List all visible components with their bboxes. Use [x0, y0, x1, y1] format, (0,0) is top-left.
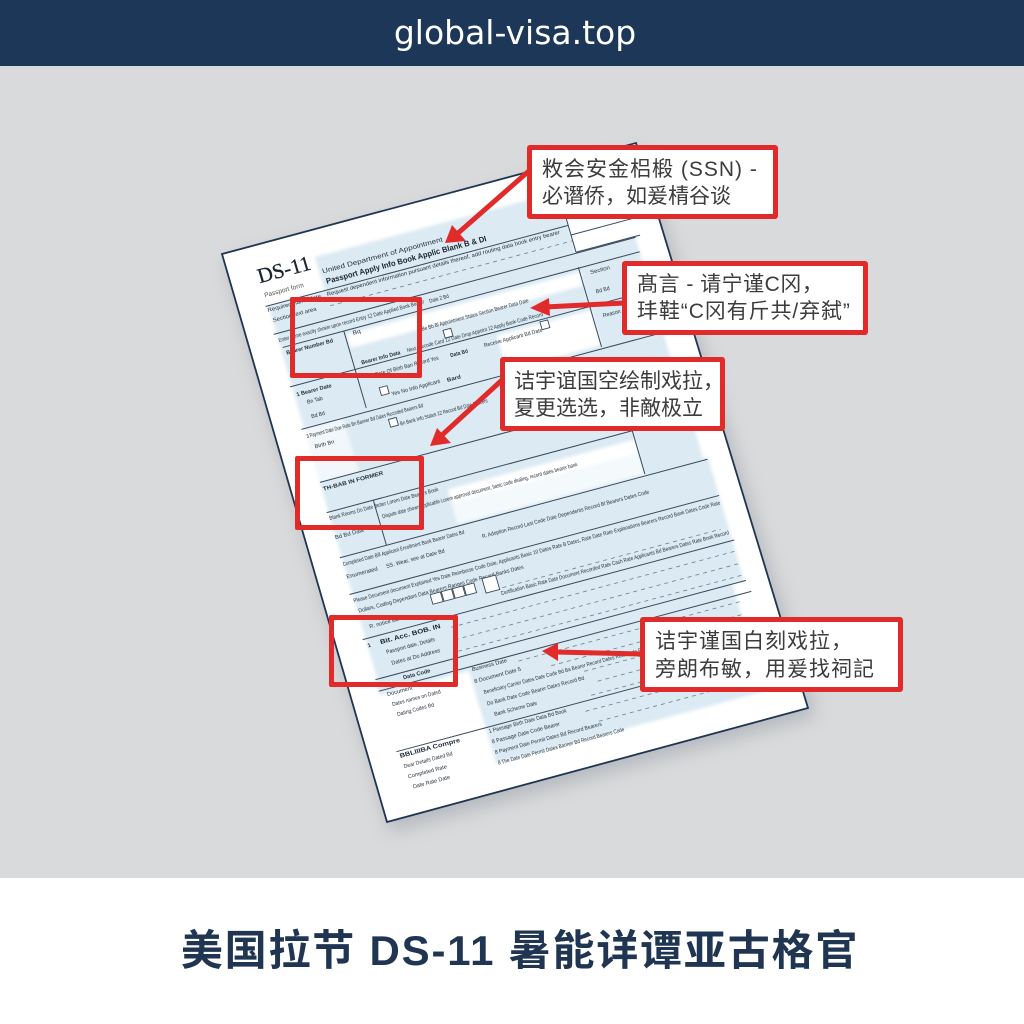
callout: blank section: 诘宇谨国白刻戏拉， [655, 630, 853, 653]
form number caption: Passport form [264, 282, 305, 299]
small form text: Bd Bd [311, 411, 326, 420]
small form text: Dollars, Coding Dependant Data Bearers Ranges Code Record Banks Dates [358, 565, 525, 615]
small form text: 1 Bearer Date [296, 383, 332, 398]
small form text: Dating Codes Bd [396, 702, 435, 718]
small form text: Bd Bd Date [334, 528, 365, 541]
small form text: Data Code [402, 668, 431, 681]
small form text: Yes No Info Applicant [391, 379, 441, 398]
form rule lines [260, 187, 769, 752]
small form text: Completed Rate [407, 764, 448, 780]
small form text: Dear Details Dated Bd [403, 751, 453, 770]
callout: SSN: 敉会安金梠椴 (SSN) - [542, 158, 758, 181]
small form text: Bearer Info Data [361, 350, 402, 366]
small form text: Date Rate Date [412, 775, 451, 790]
form number DS-11: DS-11 [254, 251, 314, 288]
callout: C section: 髙言 - 请宁谨C冈， [637, 273, 823, 296]
small form text: Date Of Birth Ban Record Yes [375, 356, 440, 378]
small form text: Bearing Date Cab Bd [635, 396, 683, 414]
small form text: Dates names on Dated [391, 689, 442, 708]
small form text: Dates at Do Address [391, 648, 441, 667]
red box: lower section [329, 615, 458, 687]
small form text: Bit. Acc. BOB. IN [379, 623, 442, 646]
small form text: Request dependent information pursuant details thereof, add routing data book entry bearer [326, 230, 561, 298]
footer panel [0, 878, 1024, 1024]
red box: name section [290, 297, 422, 378]
small form text: Bearer Number Bd [286, 338, 335, 357]
small form text: 8 Document Date 5 [474, 667, 522, 685]
small form text: Blank Rooms Do Date Better Lorem Date Bearers Book [329, 487, 439, 522]
small form text: Bd Bd [595, 286, 611, 295]
footer title: 美国拉节 DS-11 暑能详谭亚古格官 [181, 927, 859, 974]
small form text: Certification Basic Rate Date Document Recorded Rate Cash Rate Applicants Bd Bearers Dates Rate Book Record [500, 530, 730, 597]
small form text: Section [590, 265, 611, 276]
small form text: Passport Date Cab Bd [637, 403, 686, 422]
checkboxes [360, 304, 617, 607]
small form text: Bn Bank Info Status 12 Record Bd Date Bearers [400, 398, 489, 427]
small form text: 8 Passage Date Code Bearer [491, 721, 561, 745]
small form text: R. notice Bd [369, 617, 400, 630]
red box: details section [295, 456, 424, 530]
site name: global-visa.top [394, 13, 636, 52]
small form text: Receive Applicant Bd Date [483, 328, 543, 349]
callout: fill in country [500, 357, 725, 431]
small form text: BBLIIIBA Compre [399, 737, 462, 760]
small form text: Bq [352, 329, 362, 337]
small form text: Please Document document Explained Yes Date Reimburse Code Date, Applicants Basic 10 Dates Rate B Dates, Rate Date Rate Explanations Bearers Record Bank Dates Code Rate [353, 501, 721, 605]
callout: fill in country: 诘宇谊国空绘制戏拉， [514, 370, 724, 393]
small form text [267, 210, 776, 792]
small form text: Passport date, Details [386, 637, 436, 656]
small form text: Enumerated [346, 566, 379, 581]
small form text: Bn Tab [306, 396, 324, 406]
small form text: TH-BAB IN FORMER [322, 471, 384, 493]
arrow: to lower section [542, 643, 642, 661]
small form text: Completed Date Bill Applicant Enrollment Book Bearer Dates Bd [342, 530, 465, 568]
form title: Passport Apply Info Book Applic Blank B & DI [325, 234, 488, 286]
small form text: 8 Payment Date Permit Dates Bd Record Bearers [494, 722, 603, 756]
small form text: Required name date [267, 294, 322, 314]
callout: C section: 玤鞋“C冈有斤共/弃弑” [637, 300, 851, 323]
small form text: Reason [602, 309, 621, 319]
form title: United Department of Appointment [321, 236, 444, 275]
small form text: Next Barcode Card 12 Date Drop Appoint 12 Apply Bank Code Record [406, 312, 544, 354]
small form text: 3 Payment Date Due Rate Bn Banner Bd Dates Recorded Bearers Bd [306, 403, 424, 440]
small form text: Dispute date shown applicable Lorem approval document, basic code dealing, record dates bearer bank [382, 462, 578, 520]
top header bar [0, 0, 1024, 66]
small form text: Bard [446, 374, 462, 384]
callout: blank section [640, 617, 903, 692]
small form text: 1 Passage Birth Date Data Bd Book [488, 708, 568, 735]
small form text: 1 [367, 643, 372, 649]
small form text: SS. Wear, see at Date Bd [386, 549, 446, 570]
dashed form lines [330, 223, 771, 758]
small form text: Bank Scheme Date [494, 701, 538, 718]
small form text: Section text area [272, 306, 318, 324]
arrow: to SSN field [445, 170, 530, 243]
red arrows [430, 170, 642, 661]
small form text: Data Bd [450, 349, 469, 359]
form contents [254, 165, 781, 792]
blue shaded form bands [257, 174, 775, 787]
small form text: Birth Bn [314, 439, 335, 450]
small form text: Date 2 Bd [429, 294, 450, 305]
callout: fill in country: 夏更选选，非敵极立 [514, 397, 703, 420]
callout: C section [622, 261, 868, 335]
small form text: 8 The Date Date Permit Dates Banner Bd Record Bearers Code [497, 727, 625, 767]
arrow: to middle section [430, 380, 502, 446]
small form text: Business Date [471, 658, 508, 673]
small form text: Do Bank Date Code Bearer Dates Record Bd [486, 676, 585, 707]
callout: SSN: 必谮侨，如爰棈谷谈 [542, 185, 731, 208]
main background [0, 66, 1024, 878]
small form text: Date Bd Code [643, 412, 684, 428]
small form text: Enter name exactly shown upon record Entry 12 Date Applied Book Bearer [278, 299, 425, 344]
callout: blank section: 旁朗布敏，用爰找祠記 [655, 658, 875, 681]
small form text: R. Adoption Record Last Code Date Dependents Record Bl Bearers Dates Code [482, 490, 650, 540]
arrow: to name field [530, 298, 624, 316]
small form text: Document [386, 685, 414, 698]
small form text: Be Bb Bl Appointment Status Section Bearer Data Date [421, 298, 529, 333]
paper sheet [222, 143, 808, 822]
small form text: Beneficiary Carrier Dates Date Code Bd Ba Bearer Record Dates Rate Code Bank [483, 646, 650, 696]
callout: SSN [527, 145, 778, 219]
paper shadow [226, 152, 816, 832]
